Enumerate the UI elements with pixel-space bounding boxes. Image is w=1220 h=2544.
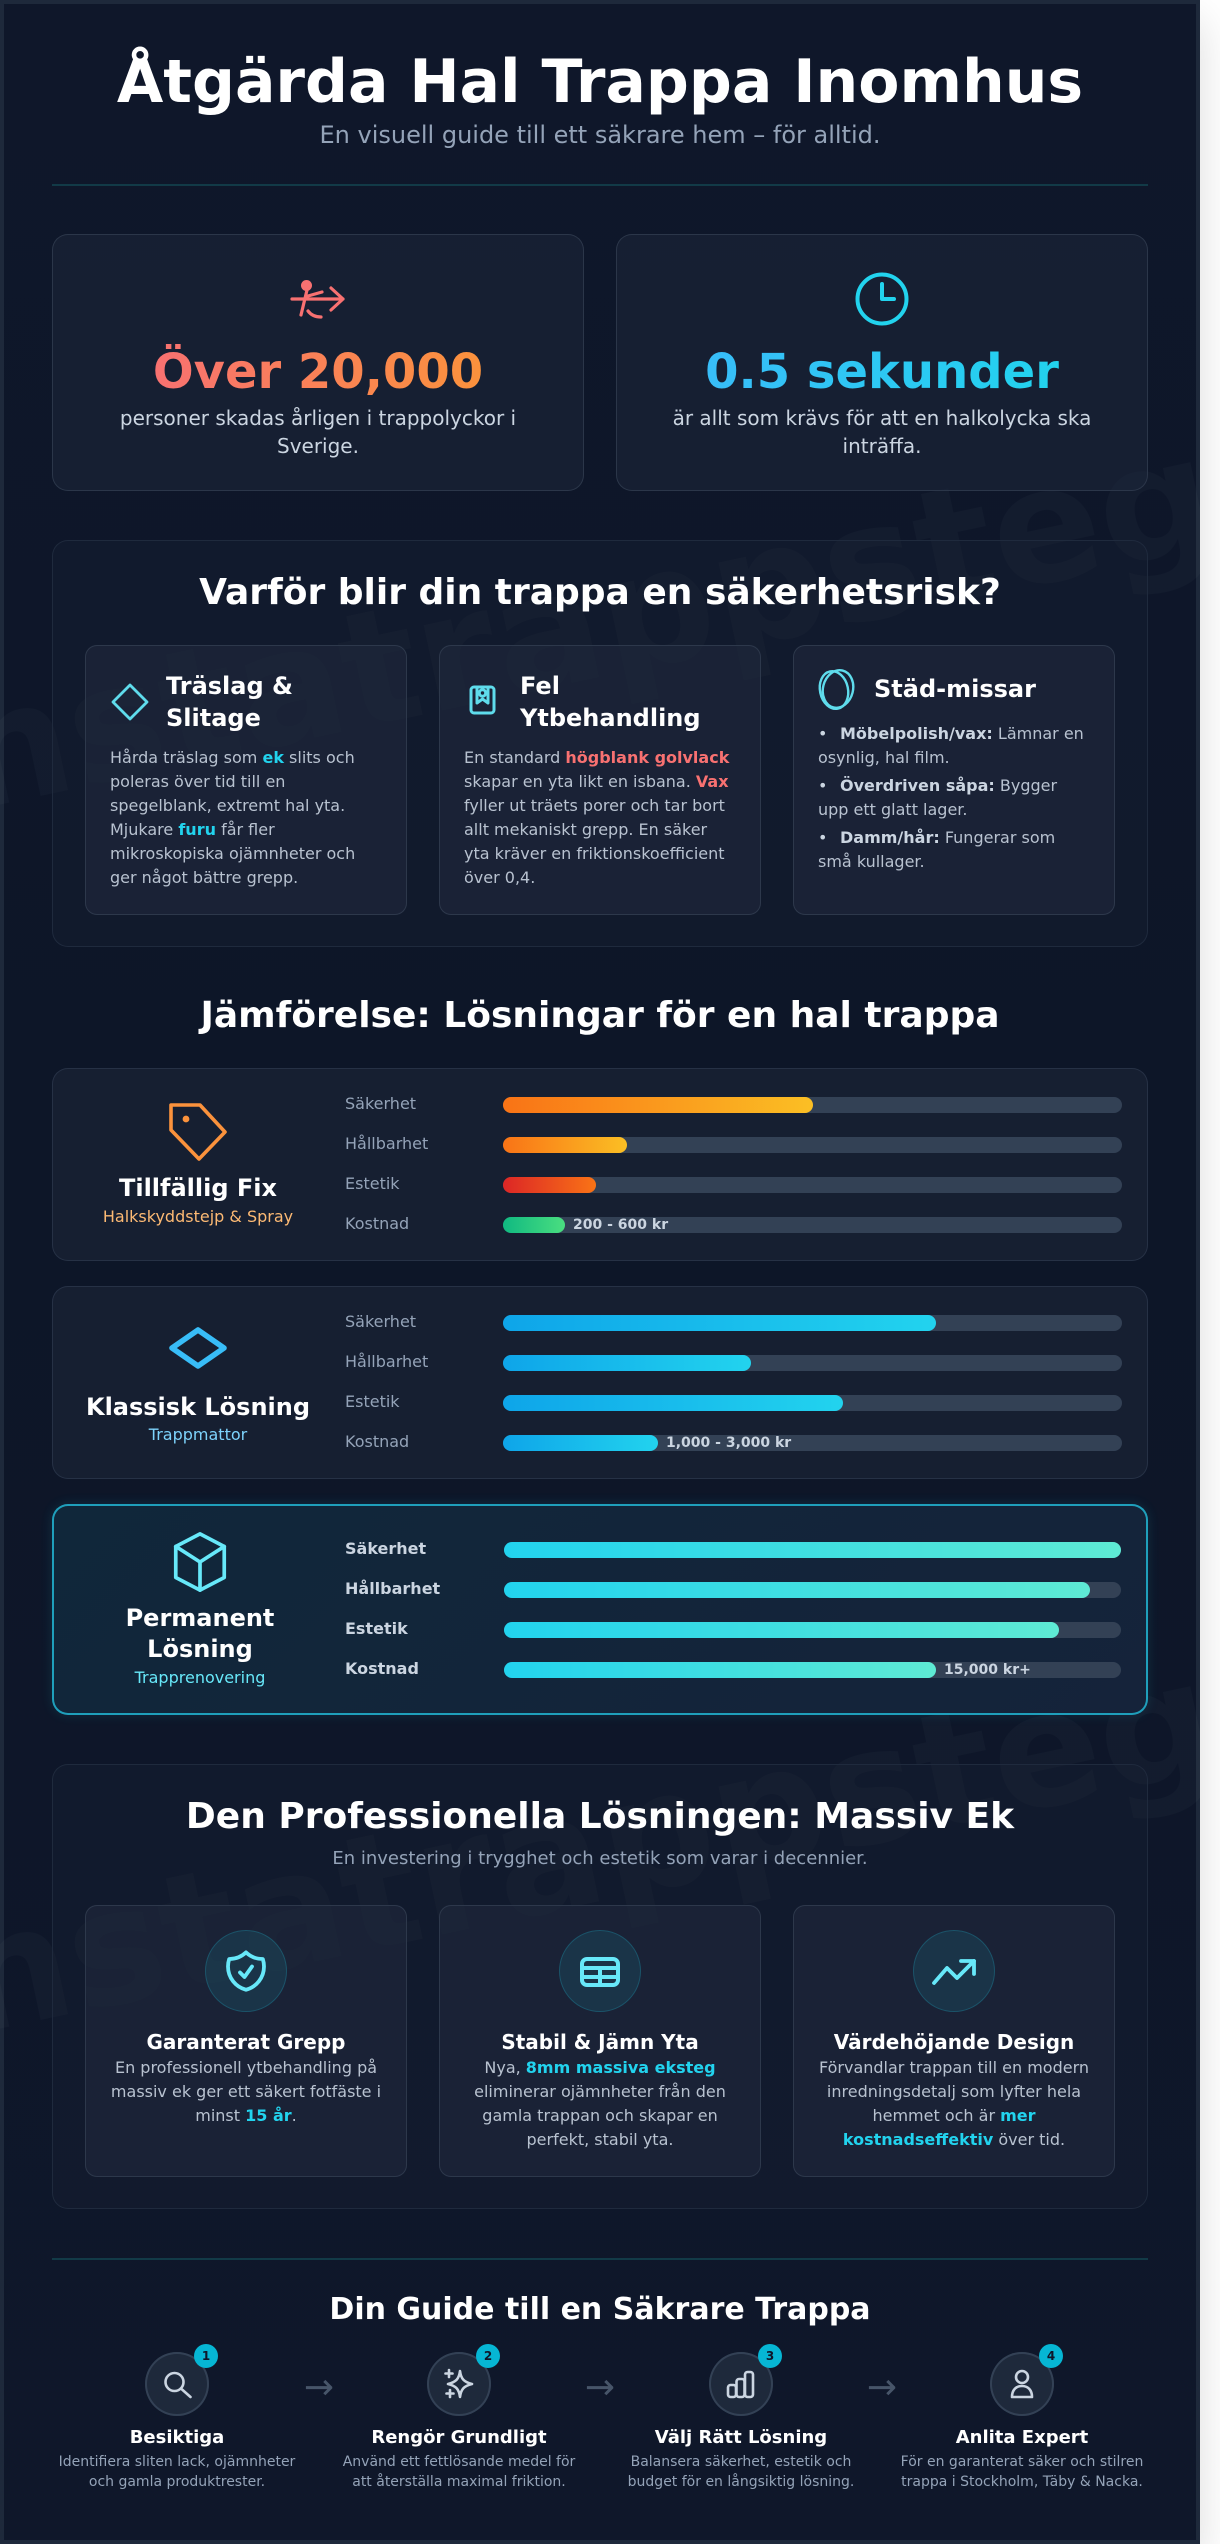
icon: trending up: [913, 1930, 995, 2012]
card text: En standard högblank golvlack: [464, 748, 729, 767]
guide heading: Din Guide till en Säkrare Trappa: [329, 2292, 871, 2327]
card heading: Stabil & Jämn Yta: [501, 2030, 699, 2054]
icon: mat diamond: [169, 1327, 227, 1369]
arrow: →: [304, 2367, 334, 2408]
bar: Kostnad: 1,000 - 3,000 kr: [666, 1435, 791, 1451]
card text: över 0,4.: [464, 868, 535, 887]
list text: Möbelpolish/vax: Lämnar en: [840, 724, 1084, 743]
row title: Klassisk Lösning: [86, 1393, 310, 1421]
card text: allt mekaniskt grepp. En säker: [464, 820, 707, 839]
step text: För en garanterat säker och stilren: [901, 2454, 1143, 2470]
bar: Kostnad: Kostnad: [345, 1659, 419, 1678]
card: value-adding design: [793, 1905, 1115, 2177]
list text: •: [818, 724, 827, 743]
bar: Kostnad: Kostnad: [345, 1214, 409, 1233]
arrow: →: [585, 2367, 615, 2408]
card: wrong finish: [439, 645, 761, 915]
card text: mikroskopiska ojämnheter och: [110, 844, 355, 863]
bar: Säkerhet: Säkerhet: [345, 1312, 416, 1331]
bar: Hållbarhet: [345, 1134, 1122, 1153]
icon: diamond: [112, 684, 148, 720]
bar: Säkerhet: [345, 1094, 1122, 1113]
row title: Lösning: [147, 1635, 253, 1663]
card text: [819, 2058, 1089, 2149]
card heading: [166, 672, 293, 732]
list text: •: [818, 776, 827, 795]
stat description: Sverige.: [277, 434, 359, 458]
bar: Hållbarhet: [345, 1352, 1122, 1371]
step text: [601, 2452, 881, 2492]
comparison row: classic solution: [52, 1286, 1148, 1479]
bar: Säkerhet: Säkerhet: [345, 1094, 416, 1113]
icon: sparkle: [427, 2352, 491, 2416]
bar: Kostnad: 15,000 kr+: [944, 1662, 1031, 1678]
step number: [194, 2344, 218, 2368]
step title: Välj Rätt Lösning: [655, 2427, 827, 2448]
step number: 3: [766, 2349, 774, 2363]
stat card: time: [616, 234, 1148, 491]
step title: Rengör Grundligt: [371, 2427, 547, 2448]
list text: Överdriven såpa: Bygger: [840, 776, 1057, 795]
card: guaranteed grip: [85, 1905, 407, 2177]
card heading: Träslag &: [166, 672, 293, 700]
bar: Hållbarhet: [345, 1579, 1121, 1598]
bar: Estetik: [345, 1392, 1122, 1411]
bar: Estetik: [345, 1619, 1121, 1638]
stat description: personer skadas årligen i trappolyckor i: [120, 406, 516, 430]
icon: shield: [205, 1930, 287, 2012]
icon: bars: [709, 2352, 773, 2416]
header: [117, 46, 1083, 149]
comparison heading: Jämförelse: Lösningar för en hal trappa: [200, 995, 1000, 1036]
step number: 4: [1047, 2349, 1055, 2363]
icon: person: [990, 2352, 1054, 2416]
bar: Estetik: Estetik: [345, 1174, 400, 1193]
card text: [464, 748, 730, 887]
icon: magnifier: [145, 2352, 209, 2416]
step text: [59, 2454, 296, 2490]
step text: [342, 2454, 576, 2490]
list text: upp ett glatt lager.: [818, 800, 968, 819]
stat number: Över 20,000: [153, 344, 483, 400]
row title: Tillfällig Fix: [119, 1174, 277, 1202]
step text: Balansera säkerhet, estetik och: [631, 2454, 851, 2470]
card text: ger något bättre grepp.: [110, 868, 298, 887]
card: stable surface: [439, 1905, 761, 2177]
stat description: [673, 406, 1091, 458]
step title: Anlita Expert: [956, 2427, 1088, 2448]
card text: inredningsdetalj som lyfter hela: [827, 2082, 1081, 2101]
card: wood type: [85, 645, 407, 915]
comparison row: permanent solution: [52, 1504, 1148, 1715]
card heading: Garanterat Grepp: [146, 2030, 346, 2054]
step number: [1039, 2344, 1063, 2368]
step text: Använd ett fettlösande medel för: [343, 2454, 575, 2470]
card text: Nya, 8mm massiva eksteg: [484, 2058, 716, 2077]
card text: skapar en yta likt en isbana. Vax: [464, 772, 729, 791]
bar: Kostnad: 200 - 600 kr: [573, 1217, 668, 1233]
panel: why the stairs are a risk: [52, 540, 1148, 947]
card heading: Ytbehandling: [520, 704, 701, 732]
step 4: [882, 2340, 1162, 2510]
card heading: Städ-missar: [874, 675, 1036, 703]
card text: poleras över tid till en: [110, 772, 285, 791]
stat number: 0.5 sekunder: [705, 344, 1059, 400]
bar: Hållbarhet: Hållbarhet: [345, 1579, 440, 1598]
list text: [818, 724, 1084, 767]
card text: [111, 2058, 381, 2125]
list text: [818, 828, 1055, 871]
card text: hemmet och är mer: [872, 2106, 1036, 2125]
card heading: Värdehöjande Design: [834, 2030, 1074, 2054]
icon: residue: [818, 669, 854, 710]
card text: eliminerar ojämnheter från den: [474, 2082, 726, 2101]
bar: Hållbarhet: Hållbarhet: [345, 1352, 428, 1371]
card text: [110, 748, 355, 887]
row subtitle: Halkskyddstejp & Spray: [103, 1207, 293, 1226]
row subtitle: Trapprenovering: [135, 1668, 265, 1687]
step number: 2: [484, 2349, 492, 2363]
panel: professional solution: [52, 1764, 1148, 2209]
section subtitle: En investering i trygghet och estetik som varar i decennier.: [332, 1848, 868, 1869]
list text: •: [818, 828, 827, 847]
step number: 1: [202, 2349, 210, 2363]
stat description: inträffa.: [843, 434, 921, 458]
step 2: [342, 2344, 576, 2490]
card text: Förvandlar trappan till en modern: [819, 2058, 1089, 2077]
card text: fyller ut träets porer och tar bort: [464, 796, 725, 815]
list text: [818, 776, 1058, 819]
bar: Hållbarhet: Hållbarhet: [345, 1134, 428, 1153]
step text: och gamla produktrester.: [89, 2474, 265, 2490]
list text: Damm/hår: Fungerar som: [840, 828, 1055, 847]
bar: Kostnad: [345, 1432, 1122, 1451]
step 3: [601, 2340, 881, 2510]
bar: Kostnad: Kostnad: [345, 1432, 409, 1451]
card: cleaning mistakes: [793, 645, 1115, 915]
stat description: är allt som krävs för att en halkolycka ska: [673, 406, 1091, 430]
card text: spegelblank, extremt hal yta.: [110, 796, 345, 815]
icon: finish: [470, 686, 496, 714]
icon: clock: [856, 272, 908, 326]
stat card: injuries: [52, 234, 584, 491]
card text: Hårda träslag som ek slits och: [110, 748, 355, 767]
bar: Kostnad: [345, 1214, 1122, 1233]
bar: Säkerhet: [345, 1312, 1122, 1331]
step text: trappa i Stockholm, Täby & Nacka.: [901, 2474, 1143, 2490]
icon: table: [559, 1930, 641, 2012]
bar: Säkerhet: Säkerhet: [345, 1539, 426, 1558]
step number: [758, 2344, 782, 2368]
card text: perfekt, stabil yta.: [527, 2130, 673, 2149]
step text: budget för en långsiktig lösning.: [628, 2474, 854, 2490]
step number: [476, 2344, 500, 2368]
row title: Permanent: [126, 1604, 274, 1632]
bar: Estetik: Estetik: [345, 1619, 408, 1638]
list text: små kullager.: [818, 852, 925, 871]
row title: [126, 1604, 274, 1663]
step text: [882, 2452, 1162, 2492]
bar: Estetik: [345, 1174, 1122, 1193]
list text: osynlig, hal film.: [818, 748, 950, 767]
step 1: [59, 2344, 296, 2490]
stat description: [120, 406, 516, 458]
icon: falling person: [290, 280, 345, 319]
row subtitle: Trappmattor: [149, 1425, 247, 1444]
card text: massiv ek ger ett säkert fotfäste i: [111, 2082, 381, 2101]
section heading: Varför blir din trappa en säkerhetsrisk?: [199, 572, 1001, 613]
card text: Mjukare furu får fler: [110, 820, 275, 839]
bar: Estetik: Estetik: [345, 1392, 400, 1411]
step text: Identifiera sliten lack, ojämnheter: [59, 2454, 295, 2470]
card text: minst 15 år.: [195, 2106, 297, 2125]
subtitle: En visuell guide till ett säkrare hem – för alltid.: [320, 121, 880, 149]
step text: att återställa maximal friktion.: [352, 2474, 566, 2490]
bar: Säkerhet: [345, 1539, 1121, 1558]
card text: yta kräver en friktionskoefficient: [464, 844, 725, 863]
arrow: →: [867, 2367, 897, 2408]
comparison row: temporary fix: [52, 1068, 1148, 1261]
card heading: [520, 672, 701, 732]
card text: kostnadseffektiv över tid.: [843, 2130, 1065, 2149]
card heading: Slitage: [166, 704, 261, 732]
section heading: Den Professionella Lösningen: Massiv Ek: [186, 1796, 1014, 1837]
icon: tag: [169, 1103, 227, 1161]
icon: cube: [174, 1532, 226, 1592]
title: Åtgärda Hal Trappa Inomhus: [117, 47, 1083, 117]
card heading: Fel: [520, 672, 560, 700]
card text: En professionell ytbehandling på: [115, 2058, 377, 2077]
card text: [474, 2058, 726, 2149]
card text: gamla trappan och skapar en: [482, 2106, 718, 2125]
bar: Kostnad: [345, 1659, 1121, 1678]
step title: Besiktiga: [130, 2427, 224, 2448]
